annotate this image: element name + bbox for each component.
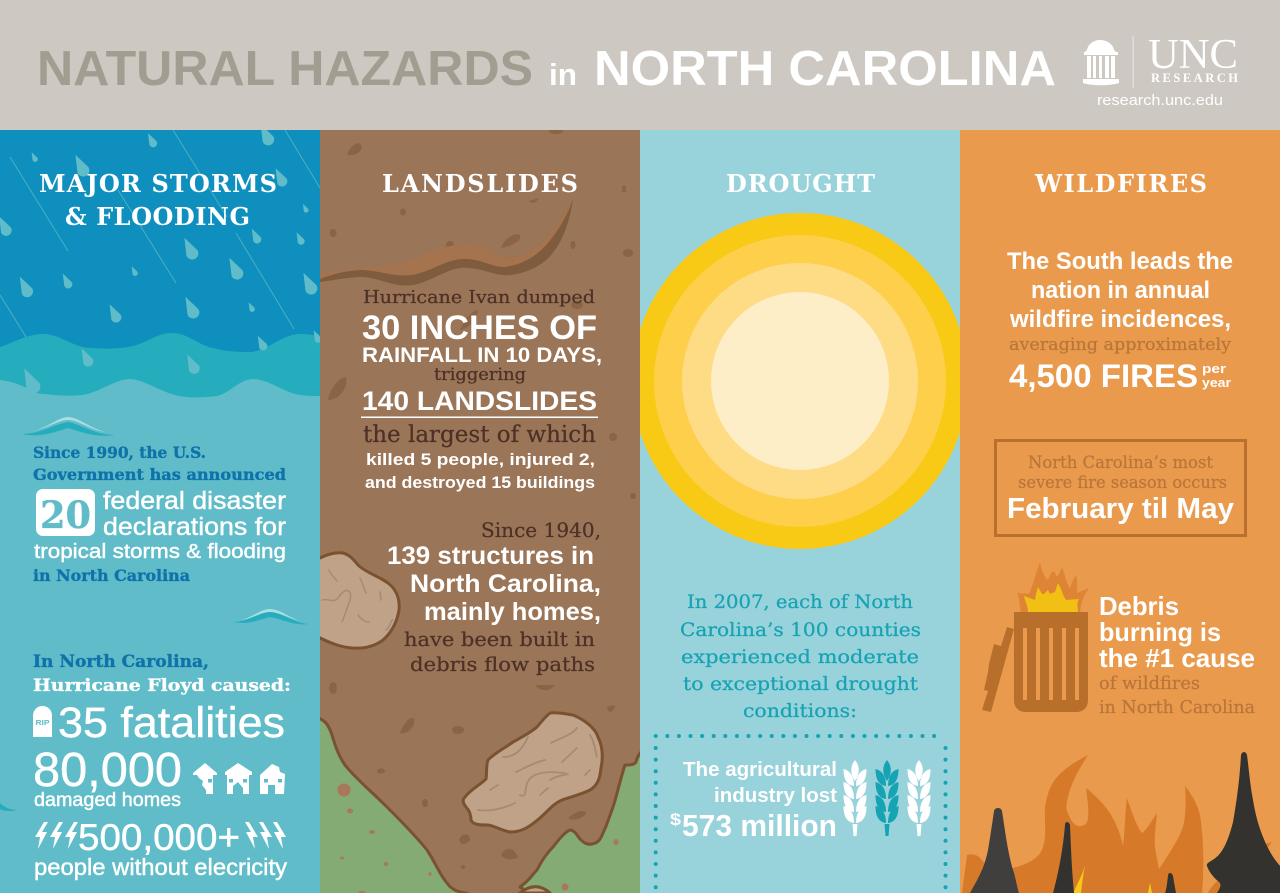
text block: debris flow paths: Since 1940, [481, 518, 601, 542]
mud blobs [328, 128, 636, 869]
text block: debris flow paths: have been built in [404, 627, 595, 651]
logo: UNC Research: RESEARCH [1151, 71, 1238, 85]
heading: major storms & flooding: & FLOODING [65, 202, 250, 231]
text block: Hurricane Ivan: Hurricane Ivan dumped [363, 287, 595, 308]
text block: Hurricane Floyd: people without elecricity [34, 854, 288, 880]
text block: 2007 drought [680, 591, 921, 722]
callout: agriculture losses: The agricultural [683, 759, 837, 781]
text block: debris burning [1099, 591, 1255, 718]
title: NORTH CAROLINA [594, 42, 1056, 96]
text block: South leads [1007, 248, 1233, 394]
text block: Hurricane Floyd: In North Carolina, [33, 652, 209, 672]
text block: debris flow paths [387, 518, 601, 676]
heading: wildfires: WILDFIRES [1034, 169, 1207, 198]
text block: federal disaster declarations [33, 443, 286, 585]
text block: Hurricane Ivan: RAINFALL IN 10 DAYS, [362, 343, 602, 367]
text block: Hurricane Floyd: 80,000 [33, 744, 182, 797]
illustration: right flame [1208, 842, 1272, 893]
icon: tombstone [33, 706, 52, 737]
callout: fire season: North Carolina’s most [1028, 453, 1213, 472]
text block: debris flow paths: mainly homes, [424, 598, 601, 626]
text block: Hurricane Ivan: triggering [434, 365, 526, 385]
callout: agriculture losses: 573 million [682, 808, 837, 843]
heading: major storms & flooding [40, 174, 276, 226]
text block: South leads: wildfire incidences, [1009, 306, 1231, 333]
text block: Hurricane Floyd: Hurricane Floyd caused: [33, 676, 291, 696]
illustration: large flames [962, 755, 1203, 893]
text block: federal disaster declarations: Government has announced [33, 465, 286, 484]
text block: Hurricane Ivan: 140 LANDSLIDES [362, 386, 597, 416]
illustration: yellow flames [1073, 866, 1152, 893]
text block: South leads: per [1202, 361, 1226, 376]
heading: drought: DROUGHT [726, 169, 875, 198]
icon: lightning bolts left [35, 822, 78, 849]
logo: UNC Research [1083, 32, 1238, 109]
text block: federal disaster declarations: in North Carolina [33, 566, 190, 585]
rain streaks [0, 130, 320, 337]
text block: Hurricane Floyd: 500,000+ [78, 817, 240, 858]
callout: agriculture losses: $ [670, 810, 682, 829]
text block: debris burning: in North Carolina [1099, 697, 1255, 718]
text block: Hurricane Ivan [361, 287, 602, 492]
text block: debris burning: Debris [1099, 591, 1179, 621]
text block: debris flow paths: 139 structures in [387, 542, 594, 570]
teal wave [0, 333, 320, 398]
text block: Hurricane Floyd [33, 652, 291, 880]
callout: agriculture losses: industry lost [714, 785, 837, 807]
callout: fire season: February til May [1007, 493, 1234, 525]
text block: federal disaster declarations: federal disaster [103, 487, 286, 515]
icon: sun [632, 213, 968, 549]
title [37, 42, 1056, 96]
text block: 2007 drought: In 2007, each of North [687, 591, 913, 613]
icon: burning trash can [982, 562, 1089, 712]
light water body [0, 379, 320, 893]
panel: landslides [316, 128, 642, 893]
illustration: charred trees [970, 752, 1280, 893]
callout: fire season: severe fire season occurs [1018, 473, 1227, 492]
icon: tombstone: RIP [36, 718, 50, 727]
icon: damaged houses [193, 763, 285, 794]
header banner [0, 0, 1280, 130]
text block: federal disaster declarations: tropical storms & flooding [34, 541, 286, 563]
text block: 2007 drought: experienced moderate [681, 646, 919, 668]
callout: fire season [996, 440, 1246, 536]
dirt specks [338, 784, 618, 893]
text block: South leads: 4,500 FIRES [1009, 358, 1198, 394]
text block: debris burning: burning is [1099, 617, 1221, 647]
text block: federal disaster declarations: Since 1990, the U.S. [33, 443, 206, 462]
wave accents [0, 417, 308, 811]
icon: wheat [844, 760, 930, 836]
logo: UNC Research: UNC [1148, 32, 1238, 78]
panel: drought [632, 130, 968, 893]
heading: landslides: LANDSLIDES [382, 169, 578, 198]
text block: 2007 drought: conditions: [743, 700, 857, 722]
icon: lightning bolts right [245, 822, 286, 849]
grass [318, 718, 642, 893]
text block: Hurricane Floyd: damaged homes [34, 790, 181, 811]
panel: major storms and flooding [0, 124, 322, 893]
badge: 20: 20 [40, 493, 91, 537]
text block: Hurricane Ivan: killed 5 people, injured 2, [366, 450, 595, 469]
rock: large boulder [463, 713, 602, 832]
heading: major storms & flooding: MAJOR STORMS [39, 169, 277, 198]
text block: federal disaster declarations: declarations for [103, 513, 286, 541]
text block: Hurricane Floyd: 35 fatalities [58, 699, 285, 747]
text block: 2007 drought: to exceptional drought [683, 673, 918, 695]
text block: Hurricane Ivan: and destroyed 15 buildings [365, 473, 595, 492]
callout: agriculture losses [656, 736, 946, 893]
text block: South leads: averaging approximately [1009, 335, 1232, 354]
title: NATURAL HAZARDS [37, 42, 533, 96]
raindrops [0, 124, 322, 394]
text block: 2007 drought: Carolina’s 100 counties [680, 619, 921, 641]
text block: debris burning: the #1 cause [1099, 643, 1255, 673]
text block: debris flow paths: debris flow paths [410, 652, 595, 676]
text block: South leads: nation in annual [1031, 277, 1210, 304]
mud streak [320, 199, 573, 286]
text block: Hurricane Ivan: the largest of which [363, 422, 596, 448]
panel: wildfires [960, 130, 1280, 893]
rock: bottom boulder [520, 887, 550, 893]
text block: debris flow paths: North Carolina, [410, 570, 601, 598]
rock: left boulder [316, 553, 399, 648]
text block: debris burning: of wildfires [1099, 673, 1200, 694]
logo: UNC Research: research.unc.edu [1097, 92, 1223, 109]
title: in [549, 57, 577, 92]
text block: South leads: The South leads the [1007, 248, 1233, 275]
text block: South leads: year [1202, 375, 1231, 390]
icon: Old Well [1083, 40, 1119, 85]
text block: Hurricane Ivan: 30 INCHES OF [362, 309, 597, 347]
